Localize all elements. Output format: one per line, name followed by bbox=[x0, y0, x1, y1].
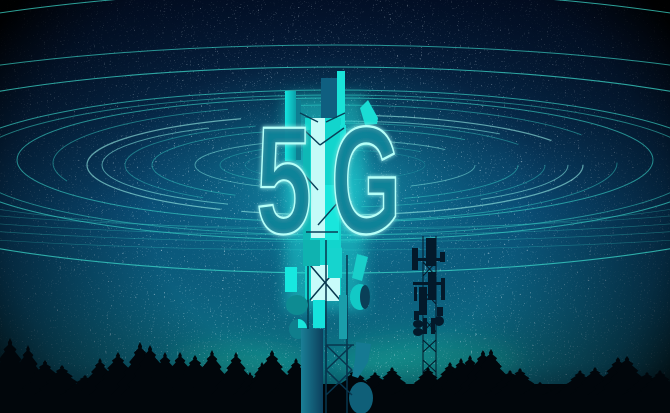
central glow bbox=[115, 55, 545, 325]
letter G: G bbox=[331, 94, 401, 266]
forest silhouette bbox=[0, 338, 670, 413]
background tower antennas bbox=[412, 238, 445, 336]
far outer arcs bbox=[0, 45, 670, 299]
dish left lower bbox=[289, 319, 307, 339]
flat lower lines bbox=[0, 90, 670, 250]
upper panels bbox=[321, 78, 337, 148]
tower glow bbox=[285, 95, 365, 310]
top dish bbox=[360, 100, 378, 125]
foreground tower base bbox=[301, 329, 373, 413]
lower panels bbox=[303, 240, 320, 266]
mast body bbox=[305, 118, 341, 300]
lattice bbox=[300, 113, 345, 232]
outer ring bbox=[0, 67, 670, 273]
mid panel bbox=[339, 295, 347, 339]
inner partial rings bbox=[245, 150, 425, 180]
bottom dish bbox=[349, 382, 373, 413]
dish right bbox=[350, 284, 370, 310]
lower bright section bbox=[311, 265, 340, 301]
5G neon lettering bbox=[256, 94, 401, 266]
horizon teal glow bbox=[170, 340, 525, 384]
background tower lattice bbox=[423, 236, 436, 385]
main tower bbox=[285, 71, 378, 413]
dark equipment box bbox=[301, 329, 323, 413]
background cell tower bbox=[412, 236, 445, 385]
letter 5: 5 bbox=[256, 96, 312, 266]
dish left upper bbox=[286, 295, 308, 315]
lower right panel bbox=[352, 342, 371, 378]
